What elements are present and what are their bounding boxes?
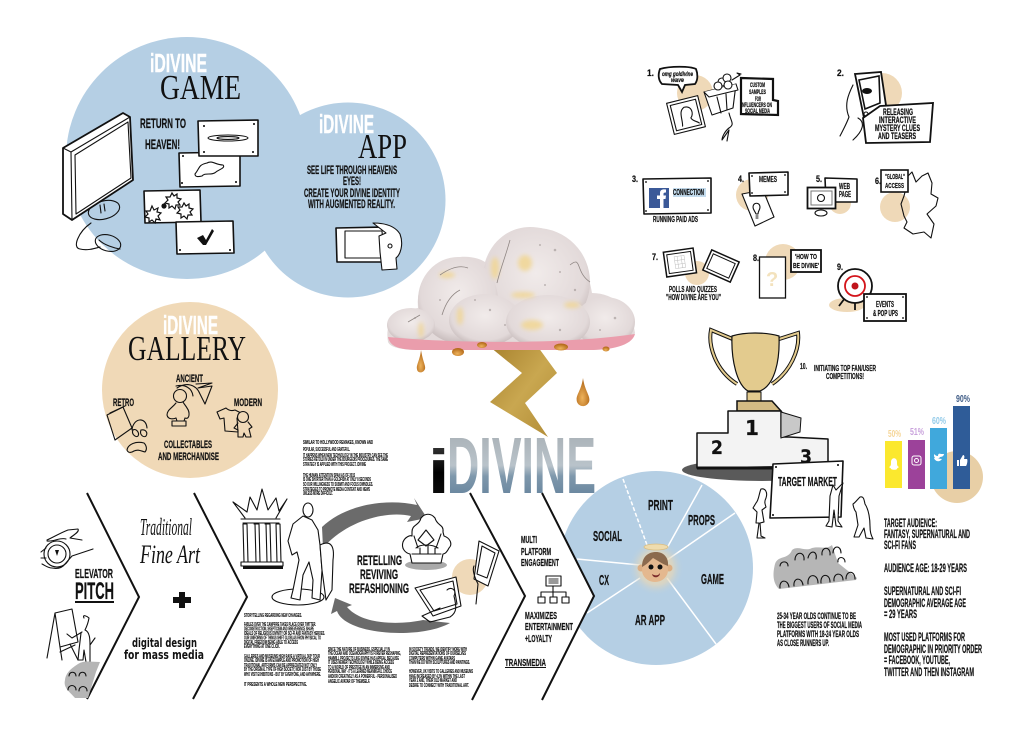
text block: society trends: DIGITAL REPRESENTATIONS OF OURSELVES <box>409 651 466 657</box>
text block: storytelling: STORYTELLING REGARDING NEW CHANGES. <box>244 613 302 619</box>
number: 3. <box>632 174 638 184</box>
audience facts <box>884 518 982 679</box>
pitch heading: PITCH <box>75 578 114 605</box>
number: 9. <box>837 262 843 272</box>
podium: 3 <box>800 446 812 468</box>
icon: trophy on podium <box>682 330 842 481</box>
text block: storytelling: TRADITIONAL ARTFORMS CAN BE APPRECIATED NOT ONLY <box>244 663 317 669</box>
text block: hollywood remakes <box>303 440 388 497</box>
wheel labels: GAME <box>701 571 724 588</box>
card: facebook connection: CONNECTION <box>673 188 704 197</box>
wheel labels: PROPS <box>688 512 715 529</box>
text block: society trends: THAN WE DO WITH SCULPTURES AND PAINTINGS. <box>409 660 470 666</box>
text block: business nature: SINCE THE NATURE OF BUSINESS, ESPECIALLY IN <box>328 647 390 653</box>
gallery label: iDIVINE <box>163 310 218 340</box>
card: halo <box>179 120 258 187</box>
text block: hollywood remakes: UNLESS MORE DIFFICULT. <box>303 491 333 497</box>
panel: step 2 mystery clues <box>837 68 933 143</box>
icon: hand with phone <box>840 72 887 140</box>
podium shadow <box>682 459 842 481</box>
icon: woman <box>753 489 767 538</box>
text: OUR UNIFORMS OF THINGS SHIFT GLOBLAS FROM PHYSICAL TO <box>244 636 321 642</box>
icon: crowd <box>774 545 857 589</box>
maximizes text: ENTERTAINMENT <box>525 621 573 633</box>
main title: i <box>428 438 450 507</box>
panel: step 6 global access <box>875 170 938 238</box>
usage note: PLATFORMS WITH 18-24 YEAR OLDS <box>777 629 859 639</box>
audience facts: TARGET AUDIENCE: <box>884 518 937 530</box>
panel: step 5 web page <box>808 174 857 216</box>
main title: DIVINE <box>447 421 596 510</box>
card: memes: MEMES <box>759 174 777 184</box>
wheel labels: SOCIAL <box>593 528 622 545</box>
text block: storytelling: FABLES OVER THE CAMPFIRE TAKES PLACE OVER TWITTER. <box>244 622 316 628</box>
icon: audience <box>65 662 100 698</box>
wheel labels <box>593 497 724 629</box>
text block: hollywood remakes: POPULAR, SUCCESSFUL AND GRATEFUL. <box>303 447 350 453</box>
card: global access: ACCESS <box>885 181 904 190</box>
gallery labels: AND MERCHANDISE <box>158 451 219 463</box>
app description: EYES! <box>343 174 361 188</box>
panel: traditional plus digital: Traditional <box>140 515 192 541</box>
speech bubble <box>659 67 697 92</box>
number: 4. <box>738 174 744 184</box>
icon: network <box>538 576 569 603</box>
panel: traditional plus digital <box>124 515 204 662</box>
card: web page: WEB <box>839 182 850 191</box>
note: custom samples: FOR <box>755 97 761 103</box>
arrow: statue to armchair <box>322 498 427 548</box>
caption <box>666 285 721 302</box>
step 10 caption: COMPETITIONS! <box>826 372 864 381</box>
main title <box>428 421 596 510</box>
speech bubble: omg goldivine <box>662 71 693 78</box>
app label: iDIVINE <box>319 109 374 139</box>
transmedia label: TRANSMEDIA <box>505 657 546 669</box>
number: 5. <box>816 174 822 184</box>
card: check mark <box>176 221 234 254</box>
text block: society trends: HAVE INCREASED BY 4.2% WITHIN THE LAST <box>409 674 465 680</box>
audience facts: = FACEBOOK, YOUTUBE, <box>884 655 950 667</box>
gallery labels: RETRO <box>113 397 134 409</box>
text block: society trends <box>409 647 473 689</box>
panel: step 9 events <box>829 262 906 321</box>
usage note <box>777 611 862 648</box>
wheel labels: PRINT <box>648 497 673 514</box>
app description <box>304 163 400 211</box>
icon: monitor <box>808 188 836 216</box>
text block: storytelling: IT PRESENTS A WHOLE NEW PERSPECTIVE. <box>244 682 307 688</box>
icon: map outline <box>901 172 938 238</box>
card: how to be divine: BE DIVINE' <box>793 261 819 270</box>
note: custom samples: SOCIAL MEDIA <box>745 109 770 115</box>
text: IDEALS OF RELIGIOUS DIVINITY OR SCI-FI AND FANTASY HEROES. <box>244 631 325 637</box>
text block: society trends: COMPUTERS WITHIN GAME AVATARS <box>409 656 455 662</box>
icon: armchair <box>402 514 451 570</box>
icon: presenter at easel <box>47 609 95 662</box>
podium <box>697 411 828 468</box>
step 10 caption: INITIATING TOP FAN/USER <box>814 364 876 373</box>
wheel labels: AR APP <box>635 612 665 629</box>
panel: transmedia <box>505 534 573 669</box>
gallery labels: ANCIENT <box>176 373 203 385</box>
bar: instagram: 51% <box>910 427 924 438</box>
icon: target <box>838 269 872 310</box>
text: STORIES RETOLD IN UNDER THE BOURGEOIS PROCEDURES. THE SAME <box>303 457 388 463</box>
card: web page <box>825 178 857 202</box>
icon: man <box>853 497 873 539</box>
card: target market: TARGET MARKET <box>778 474 837 489</box>
bar chart: social platform usage <box>885 394 983 503</box>
panel: step 8 how to be divine <box>753 244 821 298</box>
gallery labels: COLLECTABLES <box>164 439 212 451</box>
note: custom samples: SAMPLES <box>749 90 766 96</box>
note: releasing clues: INTERACTIVE <box>879 115 916 126</box>
text block: business nature: PERSONAL WAY - IT'S A LEARNED MEANINGFUL CHOICE <box>328 669 392 675</box>
panel: transmedia wheel <box>559 471 753 665</box>
usage note: AS CLOSE RUNNERS UP. <box>777 638 829 648</box>
text block: hollywood remakes: STRATEGIES TO PROMOTE MEDIA CONTENT AND NEWS <box>303 487 370 493</box>
panel: step 3 paid ads <box>632 174 711 224</box>
caption: "HOW DIVINE ARE YOU" <box>666 293 721 302</box>
number: 7. <box>652 252 658 262</box>
icon: angel character <box>628 540 684 596</box>
note: custom samples: INFLUENCERS ON <box>741 103 772 109</box>
card: light bulb <box>742 190 774 226</box>
step 10 caption <box>800 362 876 381</box>
panel: target market <box>753 461 982 679</box>
icon: quiz frames <box>663 248 739 282</box>
wheel dividers <box>577 479 735 644</box>
text block: storytelling: ONLINE. iDIVINE IS AN EXAMPLE AND PROMOTION OF HIGH <box>244 658 319 664</box>
maximizes text: +LOYALTY <box>525 633 552 645</box>
usage note: 25-34 YEAR OLDS CONTINUE TO BE <box>777 611 856 621</box>
caption: POLLS AND QUIZZES <box>669 285 717 294</box>
chevron dividers <box>87 493 594 700</box>
text block: storytelling: WHO VISIT EXHIBITIONS - BUT BY EVERYONE, AND ANYWHERE. <box>244 672 321 678</box>
text block: hollywood remakes: SO OUR WILLINGNESS TO SUBMIT AND FOCUS DWINDLES. <box>303 482 373 488</box>
text block: business nature: TO A WORLD OF PRESTIGE IN AN IMMERSIVE AND <box>328 665 390 671</box>
card: target market <box>770 461 843 518</box>
note: releasing clues: AND TEASERS <box>878 131 916 142</box>
card: global access <box>881 170 908 192</box>
card: explosions <box>144 190 201 223</box>
icon: retro book, headphones, controller <box>107 406 147 452</box>
app description: WITH AUGMENTED REALITY. <box>308 197 395 211</box>
game label: iDIVINE <box>150 48 207 78</box>
icon: ancient bust and wings <box>167 383 212 426</box>
cloud with lightning <box>387 227 635 437</box>
arrow: laptop to statue <box>331 598 450 633</box>
podium: 1 <box>745 416 759 440</box>
icon: crown and temple <box>233 489 287 569</box>
text block: society trends: YEAR 2 AND, THEIR OLD MARKET AND <box>409 678 457 684</box>
elevator heading: ELEVATOR <box>75 566 113 581</box>
card: events and pop ups: & POP UPS <box>873 309 898 318</box>
panel: target market: THE BIGGEST USERS OF SOCIAL MEDIA <box>777 620 862 630</box>
panel: elevator pitch <box>41 529 114 698</box>
text block: business nature <box>328 647 401 685</box>
text: HAMMILL PROJECTS LIKE iDIVINE HAS APPEAL BECAUSE <box>328 656 399 662</box>
wheel labels: CX <box>599 572 609 589</box>
app description: CREATE YOUR DIVINE IDENTITY <box>304 186 400 200</box>
icon: gift box <box>704 73 741 141</box>
app heading: APP <box>358 127 407 166</box>
panel: step 7 polls <box>652 248 739 302</box>
note: releasing clues: MYSTERY CLUES <box>875 123 920 134</box>
multi platform text: ENGAGEMENT <box>521 557 559 569</box>
bar: facebook: 90% <box>956 394 970 405</box>
app description: SEE LIFE THROUGH HEAVENS <box>307 163 397 177</box>
text block: hollywood remakes: STRATEGY IS APPLIED WITH THIS PROJECT. iDIVINE <box>303 462 366 468</box>
digital design text <box>124 636 204 662</box>
gold drops <box>417 342 610 406</box>
icon: hand with stopwatch <box>41 529 93 568</box>
text block: storytelling: EVERYTHING AT ONE CLICK. <box>244 644 280 650</box>
card: events and pop ups: EVENTS <box>876 300 894 309</box>
maximizes text <box>525 610 573 645</box>
text block: society trends: DESIRE TO CONNECT WITH TRADITIONAL ART. <box>409 683 469 689</box>
retelling text: REFASHIONING <box>349 580 409 596</box>
text block: business nature: IT USES NEWER TECHNOLOGY WHILE BEING ACCESS <box>328 660 394 666</box>
card: how to be divine: 'HOW TO <box>795 252 817 261</box>
maximizes text: MAXIMIZES <box>525 610 557 622</box>
bar: twitter: 60% <box>932 416 946 427</box>
step 10 caption: 10. <box>800 362 807 371</box>
card: events and pop ups <box>864 294 906 321</box>
card: global access: "GLOBAL" <box>885 172 905 181</box>
text block: hollywood remakes: SIMILAR TO HOLLYWOOD REMAKES, KNOWN AND <box>303 440 373 446</box>
lightning bolt <box>490 347 557 437</box>
text block: business nature: ANGELIC AVATAR OF THEMSELF. <box>328 679 370 685</box>
game tagline: RETURN TO <box>140 115 186 131</box>
audience facts: SCI-FI FANS <box>884 540 916 552</box>
panel: iDIVINE gallery <box>102 302 278 478</box>
audience facts: = 29 YEARS <box>884 609 917 621</box>
text block: storytelling: DIGITAL FREEDOM BEING ABLE TO ACCESS <box>244 640 298 646</box>
card: question mark: ? <box>766 269 778 291</box>
number: 1. <box>647 68 654 78</box>
text: HOWEVER, UK VISITS TO GALLERIES AND MUSEUMS <box>409 669 473 675</box>
pitch heading <box>75 578 114 605</box>
icon: statue <box>272 503 333 605</box>
digital design text: for mass media <box>124 648 204 662</box>
text block: hollywood remakes: THE HUMAN ATTENTION SPAN AS OF 2015 <box>303 473 355 479</box>
card: web page: PAGE <box>839 190 851 199</box>
text block: storytelling: GALLERIES AND MUSEUMS HIGH RAVE A VIRTUAL 360° TOUR <box>244 654 320 660</box>
text block: storytelling <box>244 613 325 688</box>
icon: computer monitor <box>63 113 133 254</box>
script text: fine art: Fine Art <box>139 540 201 569</box>
digital design text: digital design <box>132 636 197 650</box>
speech bubble: wave <box>671 77 684 84</box>
text: THE OCEAN AND OCEANOGRAPHY IS FOREVER RESHAPING, <box>328 651 401 657</box>
panel: step 1 influencers <box>647 67 778 141</box>
panel: step 4 memes <box>736 172 788 226</box>
game tagline <box>140 115 186 152</box>
gallery labels <box>113 373 262 463</box>
retelling text: RETELLING <box>357 552 402 568</box>
icon: presenter <box>826 483 843 527</box>
podium: 2 <box>711 437 723 459</box>
card: how to be divine <box>791 250 821 272</box>
gallery labels: MODERN <box>234 397 262 409</box>
multi platform text <box>521 534 559 569</box>
text block: society trends: IN SOCIETY TRENDS, WE IDENTIFY MORE WITH <box>409 647 467 653</box>
panel: retelling cycle <box>233 489 499 633</box>
panel: iDIVINE game <box>63 37 308 279</box>
number: 6. <box>875 176 881 186</box>
icon: plus <box>173 592 191 608</box>
icon: person with laptop and phone <box>415 541 499 622</box>
number: 2. <box>837 68 844 78</box>
multi platform text: MULTI <box>521 534 537 546</box>
icon: portrait frame <box>667 96 705 134</box>
gallery heading: GALLERY <box>128 329 246 368</box>
text block: business nature: AND/OR CREATIVELY AS A POWERFUL - PERSONALISED <box>328 674 397 680</box>
note: custom samples <box>741 78 778 115</box>
cloud body <box>387 227 635 350</box>
multi platform text: PLATFORM <box>521 546 551 558</box>
icon: hand holding phone <box>336 223 402 270</box>
panel: iDIVINE app <box>250 102 446 298</box>
number: 8. <box>753 253 759 263</box>
note: releasing clues: RELEASING <box>883 107 913 118</box>
text: BY THE ORIGINAL TYPE OF HIGH SOCIETY, NOR JUST BY THOSE <box>244 667 321 673</box>
bar: snapchat: 50% <box>888 429 901 440</box>
note: custom samples: CUSTOM <box>750 83 765 89</box>
text block: hollywood remakes: IS ONE SHORTER THAN A GOLDFISH AT ONLY 8 SECONDS <box>303 477 371 483</box>
game tagline: HEAVEN! <box>145 136 180 152</box>
text block: storytelling: DECONSTRUCTION, SKEPTICISM AND IRREVERENCE SHAPE <box>244 626 314 632</box>
retelling text: REVIVING <box>360 566 398 582</box>
retelling text <box>349 552 409 596</box>
note: releasing clues <box>863 103 933 143</box>
game heading: GAME <box>160 68 241 107</box>
icon: modern tee and doll <box>217 408 252 437</box>
caption: RUNNING PAID ADS <box>653 215 698 224</box>
text: IT HAPPENS WHEN NEW TECHNOLOGY IN THE INDUSTRY CAN SEE THE <box>303 453 388 459</box>
trophy <box>710 330 798 411</box>
